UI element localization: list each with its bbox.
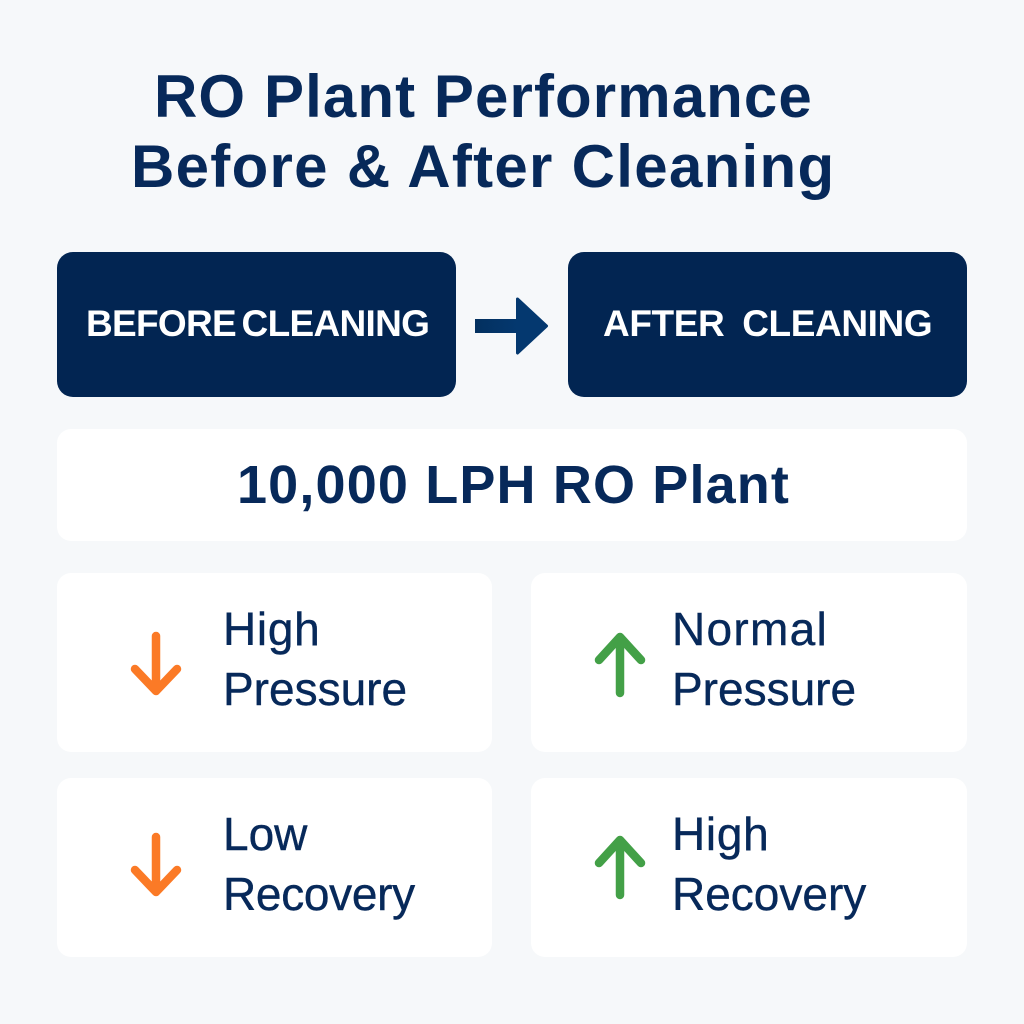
label: normal pressure: Pressure [672, 663, 856, 715]
panel: before cleaning [57, 252, 456, 397]
label: low recovery: Recovery [223, 868, 415, 920]
icon: orange down arrow [130, 632, 182, 696]
label: normal pressure [672, 603, 856, 715]
panel: plant capacity [57, 429, 967, 541]
label: high pressure: Pressure [223, 663, 407, 715]
icon: orange down arrow [130, 832, 182, 896]
label: high recovery [672, 808, 866, 920]
label: high recovery: Recovery [672, 868, 866, 920]
title: Before & After Cleaning [131, 133, 835, 200]
label: high pressure [223, 603, 407, 715]
label: normal pressure: Normal [672, 603, 828, 655]
icon: green up arrow [594, 836, 646, 900]
title: RO Plant Performance [154, 63, 813, 130]
panel: after cleaning: AFTER CLEANING [603, 303, 932, 344]
panel: after cleaning [568, 252, 967, 397]
panel: low recovery [57, 778, 492, 957]
label: high pressure: High [223, 603, 320, 655]
title [131, 63, 835, 200]
panel: high pressure [57, 573, 492, 752]
label: high recovery: High [672, 808, 769, 860]
label: low recovery [223, 808, 416, 920]
panel: before cleaning: BEFORE CLEANING [86, 303, 429, 344]
icon: green up arrow [594, 632, 646, 698]
label: low recovery: Low [223, 808, 307, 860]
panel: normal pressure [531, 573, 967, 752]
arrow: before to after [475, 298, 548, 355]
panel: high recovery [531, 778, 967, 957]
panel: plant capacity: 10,000 LPH RO Plant [237, 455, 790, 515]
